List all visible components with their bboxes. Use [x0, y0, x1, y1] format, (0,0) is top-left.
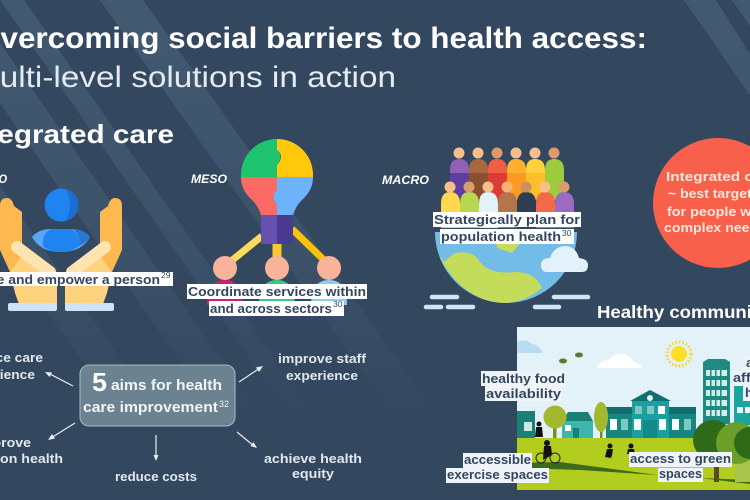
arrow: to reduce costs — [154, 435, 158, 461]
label: healthy food availability — [481, 371, 566, 401]
text: achieve health equity — [264, 451, 362, 481]
panel: micro level — [0, 174, 173, 311]
callout: integrated care target — [653, 138, 750, 268]
label: empower a person: 29 — [161, 270, 171, 280]
box: five aims for health care improvement: 32 — [219, 399, 229, 409]
icon: jigsaw light bulb network — [207, 139, 347, 305]
label: access to green spaces: access to green — [630, 451, 731, 466]
panel: macro level — [382, 148, 588, 307]
label: macro: MACRO — [382, 175, 429, 187]
label: coordinate services: 30 — [333, 299, 343, 309]
label: strategically plan — [433, 212, 581, 244]
text: improve population health — [0, 435, 63, 466]
text: improve staff experience: experience — [286, 368, 358, 383]
icon: people on a globe — [426, 148, 588, 307]
box: five aims for health care improvement: aims for health — [111, 378, 222, 394]
label: strategically plan: Strategically plan for — [434, 212, 580, 227]
icon: hands holding a person — [0, 188, 122, 311]
label: strategically plan: population health — [441, 229, 561, 244]
arrow: to staff experience — [239, 366, 263, 382]
label: accessible exercise spaces: accessible — [464, 452, 531, 467]
box: five aims for health care improvement — [80, 365, 235, 426]
text: improve staff experience — [278, 351, 367, 383]
text: improve staff experience: improve staff — [278, 351, 367, 366]
label: meso: MESO — [191, 174, 227, 186]
label: healthy food availability: availability — [486, 386, 562, 401]
figures — [535, 422, 635, 460]
text: enhance care experience — [0, 350, 43, 382]
illustration: neighbourhood scene — [517, 327, 750, 490]
label: strategically plan: 30 — [562, 228, 572, 238]
text: reduce costs: reduce costs — [115, 469, 197, 484]
box: five aims for health care improvement: 5 — [92, 367, 107, 397]
panel: healthy communities — [446, 302, 750, 490]
text: achieve health equity: achieve health — [264, 451, 362, 466]
arrow: to care experience — [45, 372, 73, 386]
box: five aims for health care improvement: care improvement — [83, 400, 218, 416]
label: access to green spaces — [629, 451, 732, 482]
text: achieve health equity: equity — [292, 466, 335, 481]
label: access to green spaces: spaces — [659, 466, 702, 481]
label: healthy food availability: healthy food — [482, 371, 565, 386]
arrow: to health equity — [237, 432, 257, 448]
title — [0, 22, 647, 94]
label: coordinate services — [187, 284, 367, 316]
label: coordinate services: Coordinate services within — [188, 284, 366, 299]
panel: five aims — [0, 350, 367, 484]
label: accessible exercise spaces: exercise spaces — [447, 467, 548, 482]
panel: meso level — [187, 139, 367, 316]
label: coordinate services: and across sectors — [210, 301, 332, 316]
arrow: to population health — [48, 423, 75, 440]
label: affordable housing — [733, 355, 750, 401]
label: accessible exercise spaces — [446, 452, 549, 483]
